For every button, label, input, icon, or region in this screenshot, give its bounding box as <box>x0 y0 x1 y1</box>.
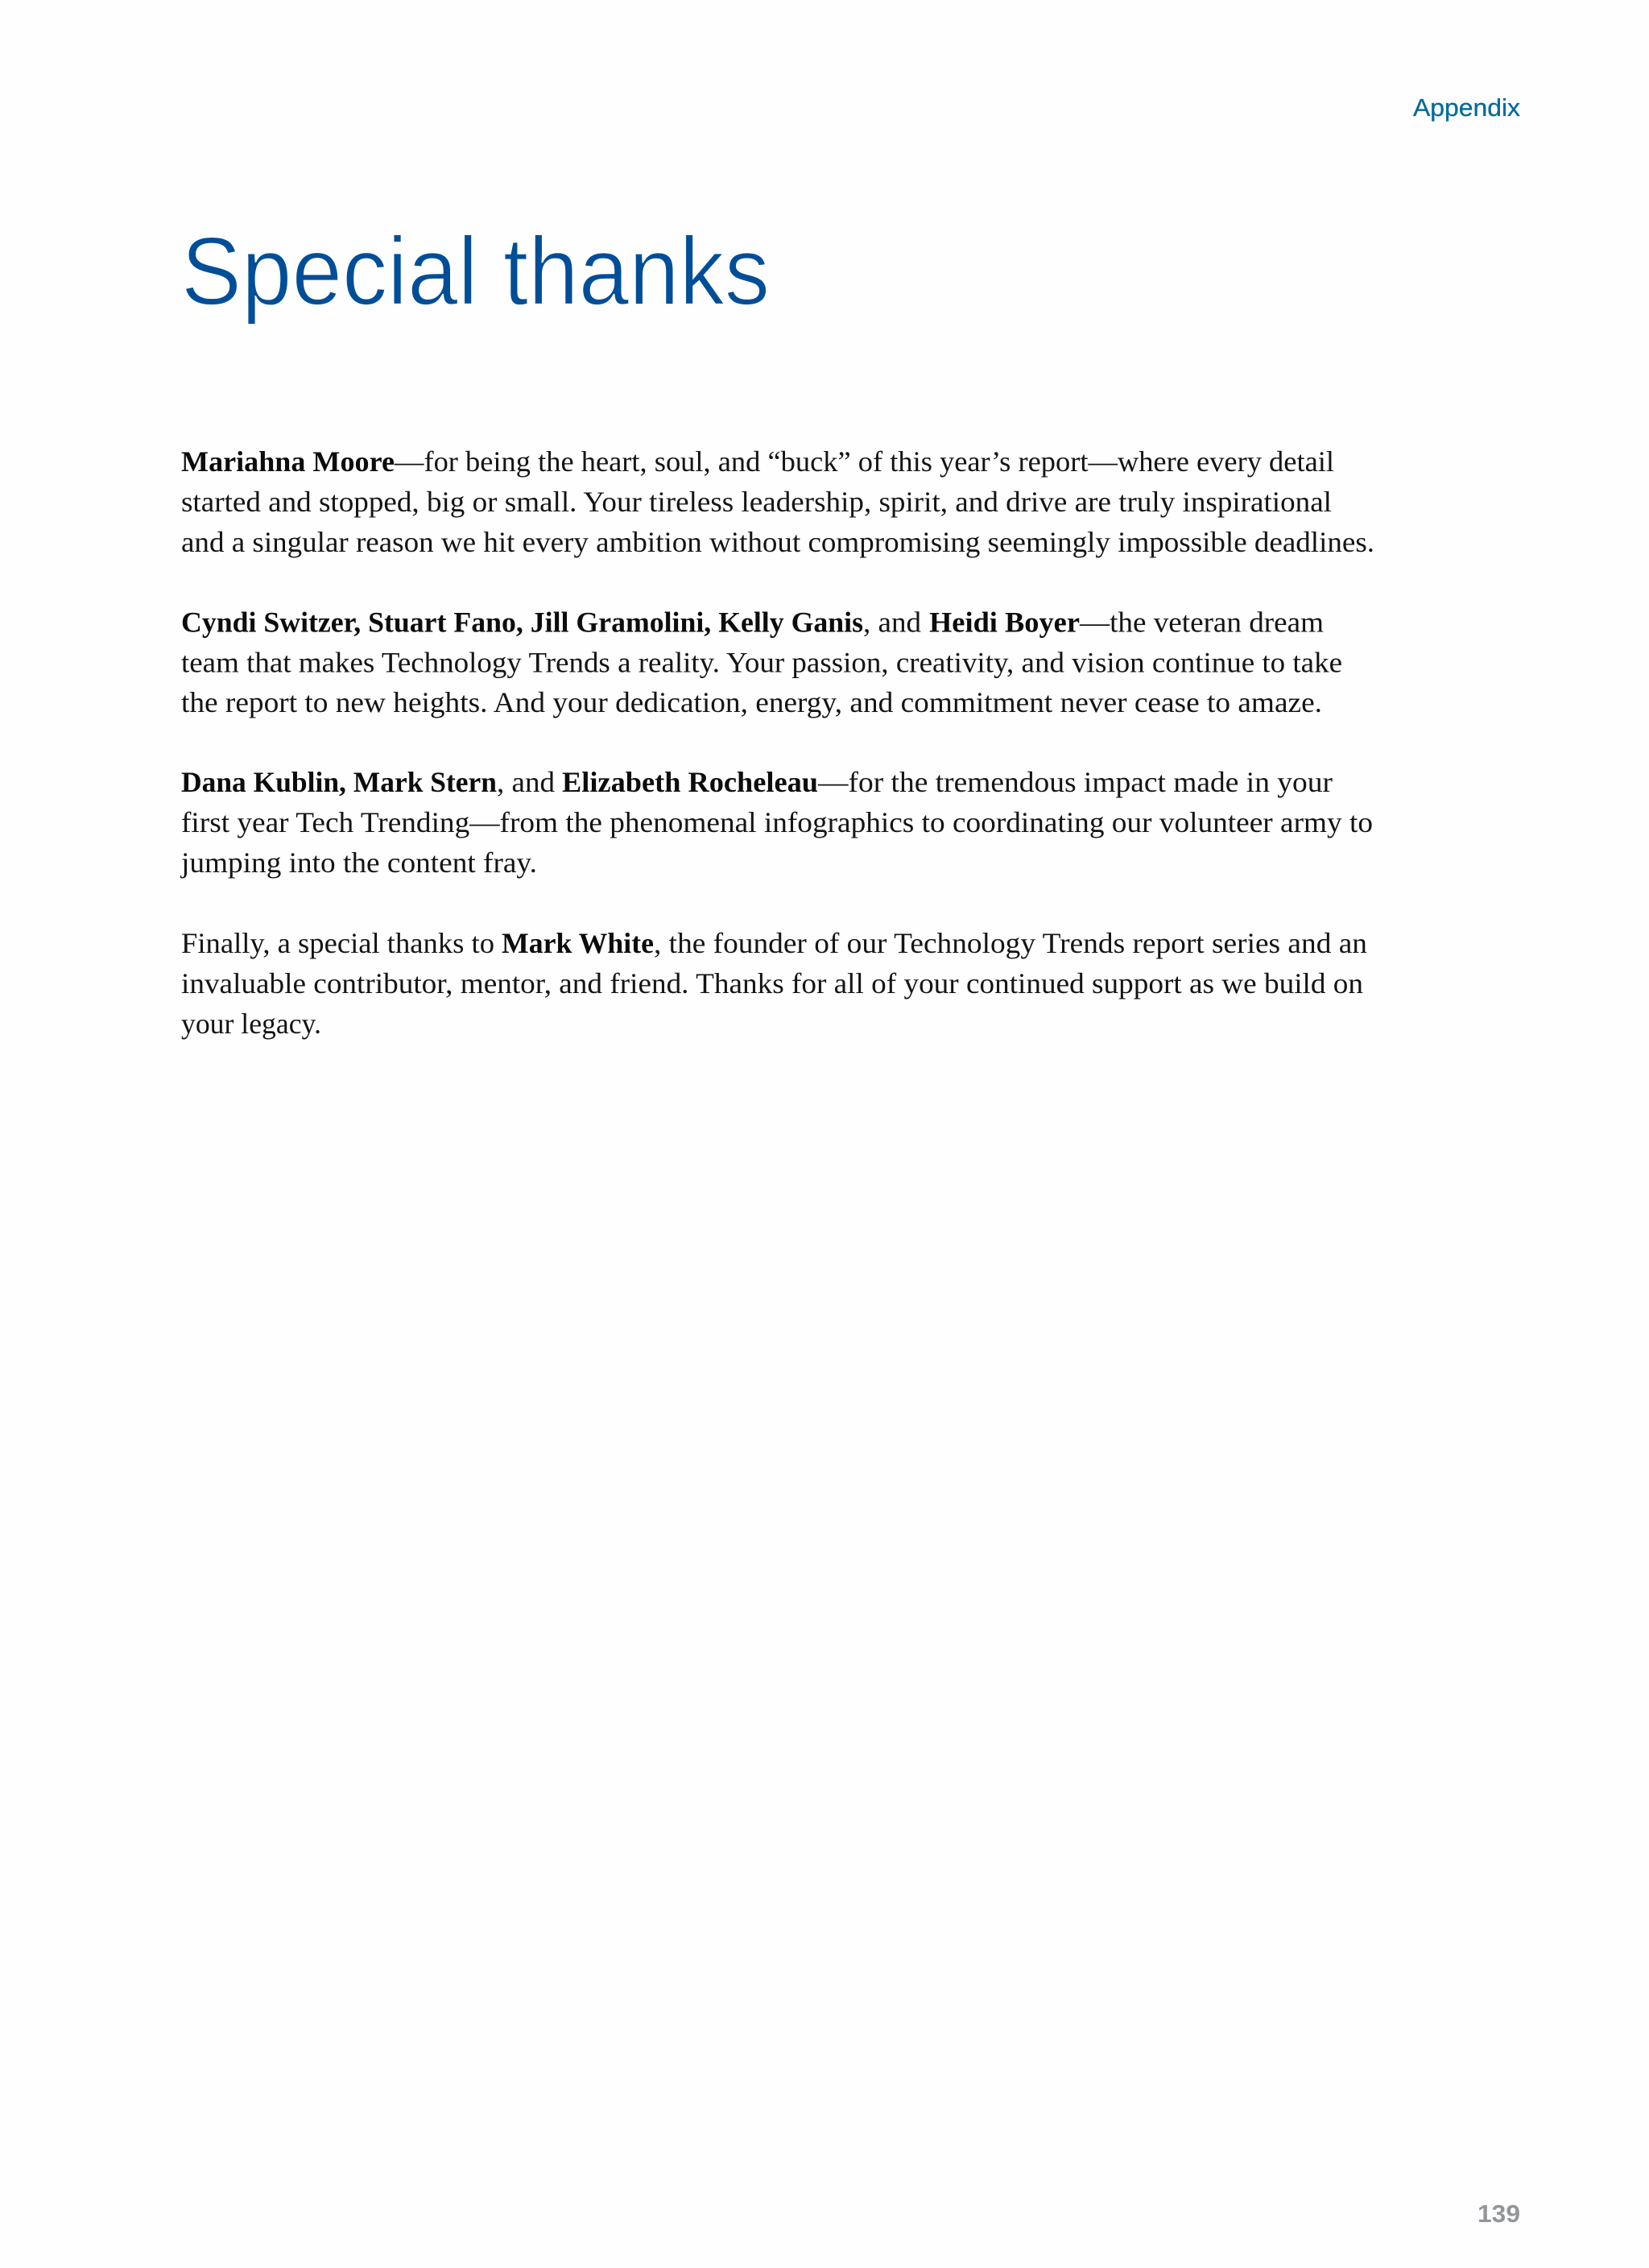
text block: veteran dream team paragraph: , and <box>863 606 921 638</box>
title: Special thanks <box>181 217 770 325</box>
text block: first year Tech Trending paragraph: Elizabeth Rocheleau <box>562 766 818 798</box>
text block: first year Tech Trending paragraph: first year Tech Trending—from the phenomenal infographics to coordinating our volunteer army to <box>181 806 1373 838</box>
text block: Mark White paragraph: invaluable contributor, mentor, and friend. Thanks for all of your continued support as we build on <box>181 967 1363 999</box>
page number: 139 <box>1477 2200 1520 2228</box>
text block: first year Tech Trending paragraph: Dana Kublin, Mark Stern <box>181 766 497 798</box>
text block: Mariahna Moore paragraph: and a singular reason we hit every ambition without compromising seemingly impossible deadlines. <box>181 526 1374 558</box>
text block: Mariahna Moore paragraph: started and stopped, big or small. Your tireless leadership, spirit, and drive are truly inspirational <box>181 486 1332 518</box>
text block: veteran dream team paragraph: Heidi Boyer <box>929 606 1080 638</box>
text block: first year Tech Trending paragraph <box>180 766 1373 879</box>
text block: veteran dream team paragraph: team that makes Technology Trends a reality. Your passion, creativity, and vision continue to take <box>181 646 1342 678</box>
text block: Mariahna Moore paragraph: —for being the heart, soul, and “buck” of this year’s report—where every detail <box>394 445 1334 478</box>
section label: Appendix: Appendix <box>1413 93 1521 122</box>
text block: first year Tech Trending paragraph: —for the tremendous impact made in your <box>817 766 1333 798</box>
text block: first year Tech Trending paragraph: , and <box>497 766 555 798</box>
text block: Mark White paragraph: , the founder of our Technology Trends report series and an <box>654 927 1367 959</box>
text block: veteran dream team paragraph: the report to new heights. And your dedication, energy, and commitment never cease to amaze. <box>181 686 1322 718</box>
text block: Mark White paragraph: your legacy. <box>181 1008 321 1040</box>
text block: Mark White paragraph: Mark White <box>502 927 654 959</box>
text block: Mariahna Moore paragraph: Mariahna Moore <box>181 445 395 478</box>
text block: veteran dream team paragraph <box>181 606 1342 718</box>
text block: veteran dream team paragraph: Cyndi Switzer, Stuart Fano, Jill Gramolini, Kelly Ganis <box>181 606 863 638</box>
text block: Mark White paragraph: Finally, a special thanks to <box>181 927 494 959</box>
text block: first year Tech Trending paragraph: jumping into the content fray. <box>180 846 537 879</box>
text block: veteran dream team paragraph: —the veteran dream <box>1079 606 1324 638</box>
text block: Mark White paragraph <box>181 927 1367 1040</box>
text block: Mariahna Moore paragraph <box>181 445 1374 558</box>
